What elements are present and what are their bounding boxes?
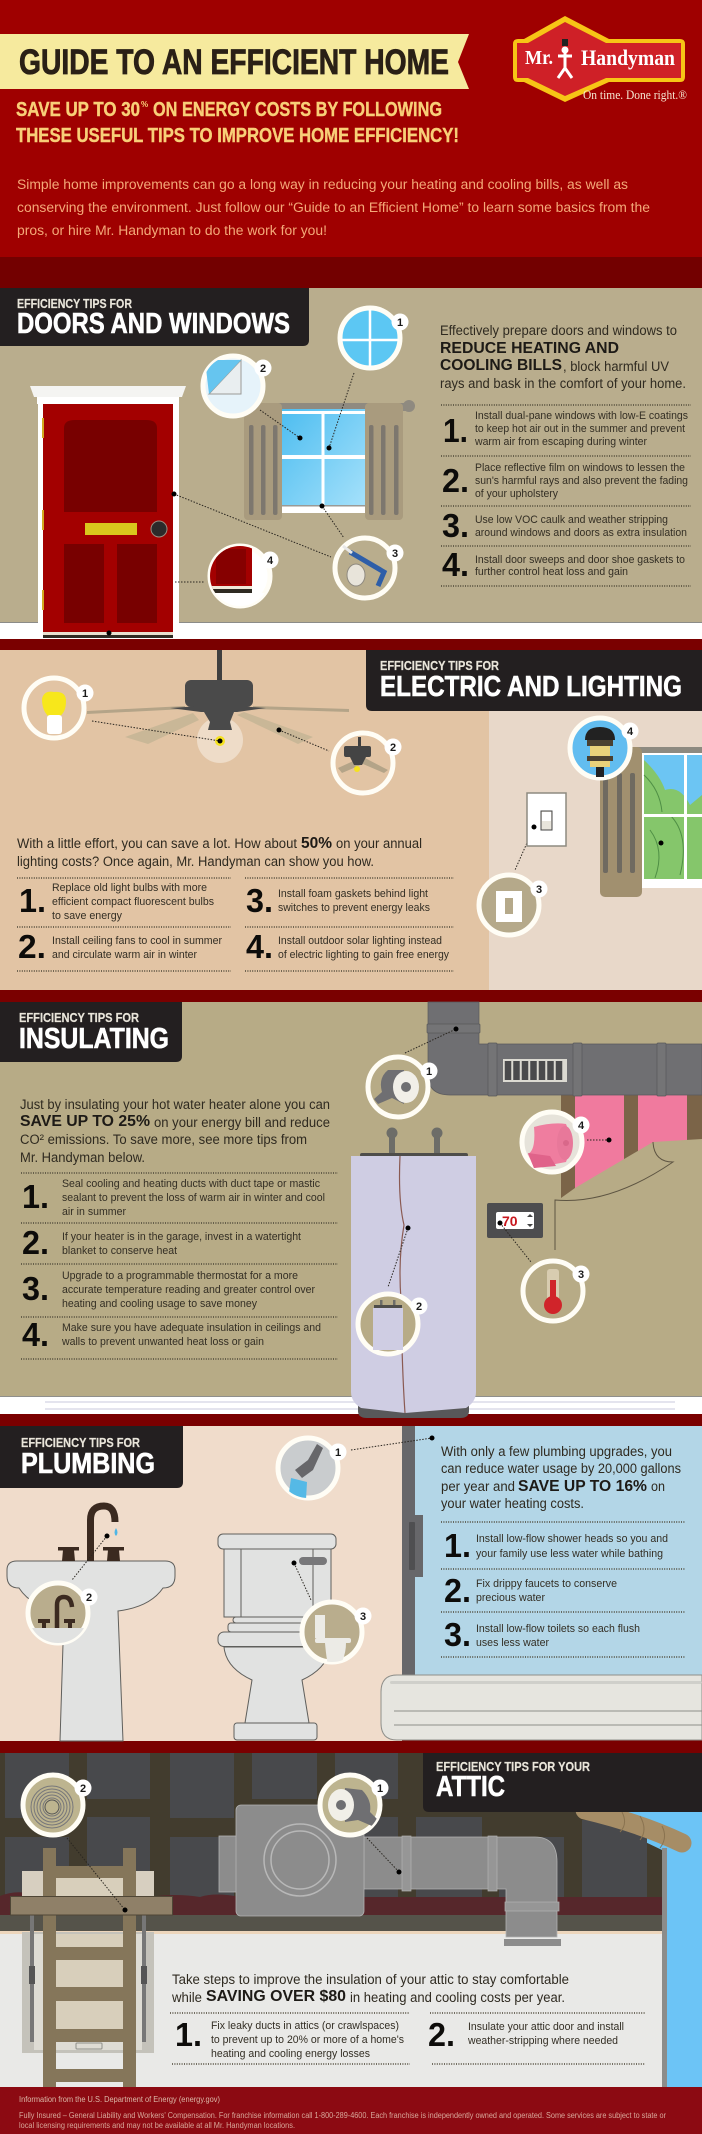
tips list: Insulate your attic door and install: [468, 2021, 624, 2033]
intro text: Effectively prepare doors and windows to: [440, 323, 677, 338]
footer: local licensing requirements and may not be available at all Mr. Handyman locations.: [19, 2121, 295, 2130]
tips list: Upgrade to a programmable thermostat for a more: [62, 1270, 298, 1282]
intro text: rays and bask in the comfort of your home.: [440, 376, 686, 391]
intro text: COOLING BILLS: [440, 357, 562, 374]
panel: doors and windows: [0, 288, 702, 639]
intro text: Simple home improvements can go a long way in reducing your heating and cooling bills, as well as: [17, 177, 628, 192]
callout 1: shower head: 1: [335, 1447, 341, 1459]
intro text: Mr. Handyman below.: [20, 1150, 145, 1165]
tips list: 2.: [444, 1572, 471, 1609]
tips list: weather-stripping where needed: [467, 2035, 618, 2047]
heading: EFFICIENCY TIPS FOR: [19, 1010, 140, 1025]
tips list: to keep hot air out in the summer and prevent: [475, 423, 685, 435]
tips list: air in summer: [62, 1206, 126, 1218]
tips list: Install outdoor solar lighting instead: [278, 935, 442, 947]
callout 2: reflective film: 2: [260, 363, 266, 375]
intro text: [441, 1444, 681, 1511]
callout 1: window: 1: [397, 317, 403, 329]
panel: attic: [0, 1753, 702, 2087]
heading: ATTIC: [436, 1771, 505, 1803]
callout 2: heater blanket: 2: [416, 1301, 422, 1313]
intro text: can reduce water usage by 20,000 gallons: [441, 1461, 681, 1476]
tips list: precious water: [476, 1592, 545, 1604]
air duct: [219, 1805, 561, 1946]
tips list: 4.: [22, 1316, 49, 1353]
intro text: , block harmful UV: [563, 359, 669, 374]
tips list: blanket to conserve heat: [62, 1245, 177, 1257]
water heater: [351, 1128, 476, 1418]
tips list: your family use less water while bathing: [476, 1548, 663, 1560]
tips list: 1.: [443, 412, 468, 449]
tips list: 1.: [444, 1527, 471, 1564]
tips list: 1.: [19, 882, 46, 919]
tips list: to save energy: [52, 910, 122, 922]
tips list: Install dual-pane windows with low-E coatings: [475, 410, 688, 422]
callout 4: solar light: 4: [627, 726, 634, 738]
ductwork: [427, 1002, 702, 1096]
tips list: 3.: [442, 507, 469, 544]
intro text: REDUCE HEATING AND: [440, 340, 619, 357]
intro text: per year and: [441, 1479, 515, 1494]
attic hatch and ladder: [10, 1848, 172, 2087]
blown insulation: [0, 1892, 662, 1917]
heading: [366, 650, 702, 711]
bathtub: [381, 1675, 702, 1740]
panel: electric and lighting: [0, 650, 702, 990]
thermostat: [487, 1203, 543, 1238]
callout 4: insulation roll: 4: [578, 1120, 585, 1132]
floor and ceiling: [0, 1848, 667, 2087]
logo: Mr. Handyman: Handyman: [581, 45, 675, 70]
subheading: ON ENERGY COSTS BY FOLLOWING: [153, 99, 442, 121]
callout 1: shower head: [278, 1436, 434, 1500]
intro text: Take steps to improve the insulation of your attic to stay comfortable: [172, 1972, 569, 1987]
callout 2: heater blanket: [358, 1294, 428, 1354]
tips list: 2.: [428, 2016, 455, 2053]
logo: Mr. Handyman: Mr.: [525, 47, 553, 69]
thermostat: 70: [502, 1213, 518, 1229]
callout 2: faucet: 2: [86, 1592, 92, 1604]
callout 1: CFL bulb: 1: [82, 688, 88, 700]
intro text: in heating and cooling costs per year.: [350, 1990, 565, 2005]
tips list: efficient compact fluorescent bulbs: [52, 896, 214, 908]
subheading: SAVE UP TO 30: [16, 99, 140, 121]
panel: plumbing: [0, 1426, 702, 1741]
callout 2: insulation ring: 2: [80, 1783, 86, 1795]
intro text: CO² emissions. To save more, see more tips from: [20, 1132, 307, 1147]
tips list: Install foam gaskets behind light: [278, 888, 428, 900]
tips list: [441, 405, 691, 586]
tips list: of electric lighting to gain free energy: [278, 949, 449, 961]
tips list: 3.: [444, 1616, 471, 1653]
callout 4: solar light: [570, 718, 638, 778]
callout 1: CFL bulb: [24, 678, 94, 738]
intro text: 50%: [301, 835, 332, 852]
window with curtains: [244, 400, 415, 520]
subheading: THESE USEFUL TIPS TO IMPROVE HOME EFFICIENCY!: [16, 125, 459, 147]
callout 3: toilet: 3: [360, 1611, 366, 1623]
title banner: GUIDE TO AN EFFICIENT HOME: [19, 43, 449, 82]
heading: EFFICIENCY TIPS FOR: [380, 658, 500, 673]
tips list: Install door sweeps and door shoe gaskets to: [475, 554, 685, 566]
intro text: With a little effort, you can save a lot. How about: [17, 836, 297, 851]
intro text: on your annual: [336, 836, 422, 851]
tips list: around windows and doors as extra insulation: [475, 527, 687, 539]
intro text: SAVE UP TO 25%: [20, 1113, 150, 1130]
intro text: your water heating costs.: [441, 1496, 584, 1511]
tips list: walls to prevent unwanted heat loss or gain: [61, 1336, 264, 1348]
callout 2: reflective film: [203, 356, 272, 416]
callout 3: caulk gun: [335, 538, 404, 598]
ceiling fan: [87, 650, 349, 763]
panel: insulating: [0, 1002, 702, 1418]
tips list: to prevent up to 20% or more of a home's: [211, 2034, 404, 2046]
tips list: 2.: [18, 928, 46, 965]
tips list: Seal cooling and heating ducts with duct tape or mastic: [62, 1178, 320, 1190]
intro text: With only a few plumbing upgrades, you: [441, 1444, 672, 1459]
tips list: 3.: [22, 1270, 49, 1307]
callout 1: duct tape: 1: [426, 1066, 432, 1078]
leader lines: [388, 1026, 612, 1287]
callout 4: door sweep: [205, 545, 278, 613]
logo: Mr. Handyman: [513, 16, 687, 102]
callout 1: duct tape: 1: [377, 1783, 383, 1795]
tips list: Place reflective film on windows to lessen the: [475, 462, 685, 474]
callout 3: foam gasket switch: [479, 875, 548, 935]
title banner: [0, 34, 469, 89]
tips list: warm air from escaping during winter: [474, 436, 647, 448]
callout 1: window: [340, 308, 408, 368]
subheading: %: [141, 100, 148, 109]
tips list: [441, 1522, 685, 1657]
tips list: Make sure you have adequate insulation in ceilings and: [62, 1322, 321, 1334]
heading: PLUMBING: [21, 1448, 155, 1480]
heading: [423, 1753, 702, 1812]
leader lines: [67, 1838, 402, 1912]
leader lines: [106, 373, 354, 636]
insulation and studs: [555, 1095, 702, 1300]
intro text: Just by insulating your hot water heater alone you can: [20, 1097, 330, 1112]
tips list: and circulate warm air in winter: [52, 949, 197, 961]
callout 3: caulk gun: 3: [392, 548, 398, 560]
heading: EFFICIENCY TIPS FOR: [17, 296, 132, 311]
callout 1: duct tape: [368, 1057, 438, 1117]
heading: DOORS AND WINDOWS: [17, 308, 290, 340]
intro text: SAVING OVER $80: [206, 1988, 346, 2005]
tips list: 3.: [246, 882, 273, 919]
heading: EFFICIENCY TIPS FOR: [21, 1435, 141, 1450]
tips list: 2.: [22, 1224, 49, 1261]
intro text: lighting costs? Once again, Mr. Handyman can show you how.: [17, 854, 374, 869]
tips list: sealant to prevent the loss of warm air in winter and cool: [62, 1192, 325, 1204]
tips list: Fix leaky ducts in attics (or crawlspaces): [211, 2020, 399, 2032]
tips list: 1.: [175, 2016, 202, 2053]
tips list: Use low VOC caulk and weather stripping: [475, 514, 668, 526]
intro text: [17, 177, 650, 238]
heading: EFFICIENCY TIPS FOR YOUR: [436, 1759, 591, 1774]
tips list: heating and cooling energy losses: [211, 2048, 370, 2060]
tips list: 2.: [442, 462, 469, 499]
heading: [0, 1426, 183, 1488]
toilet: [218, 1534, 336, 1740]
tips list: Fix drippy faucets to conserve: [476, 1578, 617, 1590]
subheading: [16, 99, 459, 147]
callout 4: door sweep: 4: [267, 555, 274, 567]
light switch: [527, 793, 566, 846]
tips list: heating and cooling usage to save money: [62, 1298, 257, 1310]
callout 2: insulation ring: [23, 1775, 92, 1835]
intro text: while: [171, 1990, 202, 2005]
tips list: Replace old light bulbs with more: [52, 882, 207, 894]
tips list: accurate temperature reading and greater control over: [62, 1284, 315, 1296]
callout 3: thermometer: 3: [578, 1269, 584, 1281]
tips list: [170, 2013, 645, 2064]
window with curtain: [600, 747, 702, 897]
tips list: [21, 1173, 338, 1359]
tips list: 1.: [22, 1178, 49, 1215]
footer: Information from the U.S. Department of Energy (energy.gov): [19, 2095, 220, 2104]
leader lines: [92, 721, 661, 870]
tips list: If your heater is in the garage, invest in a watertight: [62, 1231, 301, 1243]
heading: [0, 288, 309, 346]
sink: [7, 1506, 175, 1741]
intro text: [17, 835, 422, 869]
tips list: switches to prevent energy leaks: [278, 902, 430, 914]
intro text: SAVE UP TO 16%: [518, 1478, 647, 1495]
callout 3: thermometer: [523, 1261, 590, 1321]
logo: Mr. Handyman: On time. Done right.®: [583, 87, 687, 102]
tips list: 4.: [246, 928, 273, 965]
intro text: on your energy bill and reduce: [154, 1115, 330, 1130]
intro text: [20, 1097, 330, 1165]
callout 3: foam gasket switch: 3: [536, 884, 542, 896]
intro text: [440, 323, 686, 391]
callout 2: faucet: [20, 1583, 100, 1648]
tips list: [17, 878, 454, 971]
footer: [0, 2087, 702, 2134]
callout 1: duct tape: [320, 1775, 388, 1835]
tips list: uses less water: [476, 1637, 549, 1649]
intro text: [171, 1972, 569, 2005]
intro text: pros, or hire Mr. Handyman to do the work for you!: [17, 223, 327, 238]
panel: header: [0, 0, 702, 288]
intro text: on: [651, 1479, 665, 1494]
door: [30, 386, 186, 639]
tips list: of your upholstery: [475, 488, 558, 500]
tips list: Install ceiling fans to cool in summer: [52, 935, 222, 947]
callout 2: ceiling fan: 2: [390, 742, 396, 754]
callout 3: toilet: [302, 1602, 372, 1666]
tips list: sun's harmful rays and also prevent the fading: [475, 475, 688, 487]
heading: [0, 1002, 182, 1062]
tips list: Install low-flow shower heads so you and: [476, 1533, 668, 1545]
callout 4: insulation roll: [522, 1112, 590, 1172]
heading: INSULATING: [19, 1023, 169, 1055]
callout 2: ceiling fan: [333, 733, 402, 793]
tips list: Install low-flow toilets so each flush: [476, 1623, 640, 1635]
wall panels: [5, 1753, 647, 1897]
roof eave: [585, 1810, 682, 1848]
tips list: 4.: [442, 546, 469, 583]
intro text: conserving the environment. Just follow our “Guide to an Efficient Home” to learn some basics from the: [17, 200, 650, 215]
tips list: further control heat loss and gain: [475, 566, 628, 578]
